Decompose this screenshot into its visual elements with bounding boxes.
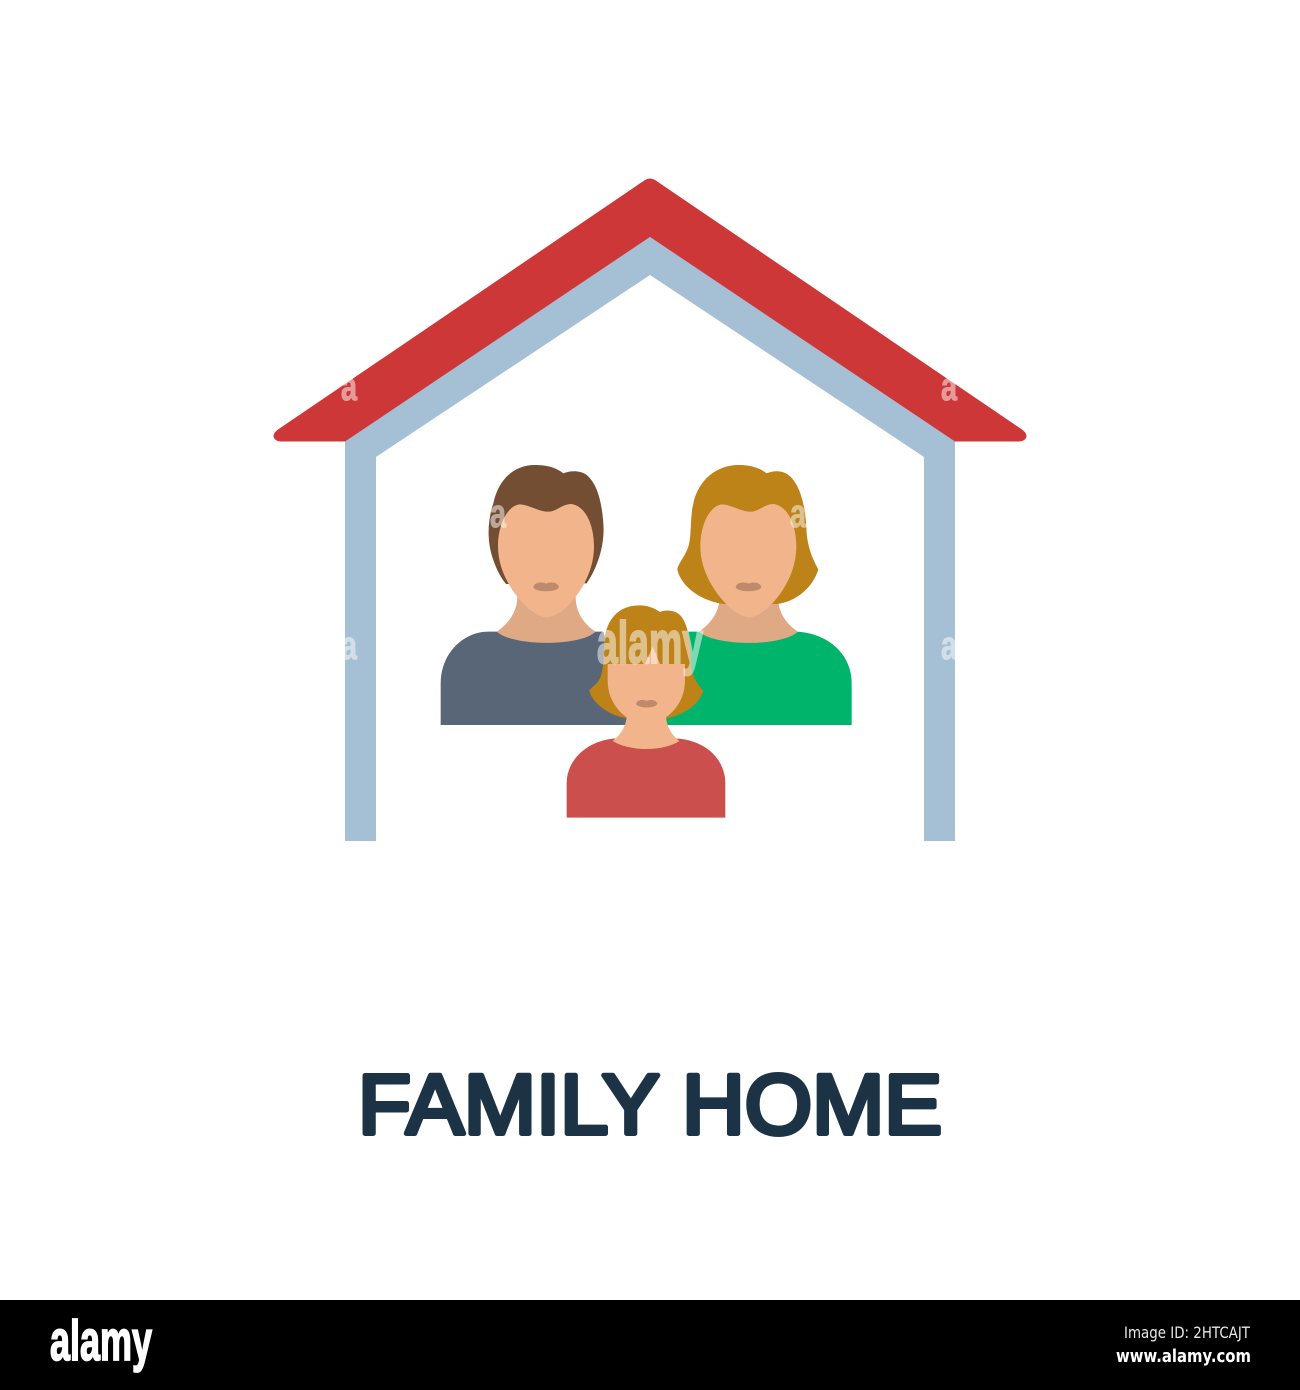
child hair (589, 605, 703, 718)
mother neck (699, 597, 798, 643)
title: FAMILY HOME (358, 1058, 942, 1152)
mother face (700, 504, 796, 617)
footer bar (0, 1300, 1300, 1390)
mother mouth (736, 582, 761, 591)
watermark: centre: alamy (597, 610, 703, 676)
icon: family (441, 465, 852, 818)
mother (663, 465, 852, 725)
child face and neck (608, 647, 685, 749)
watermarks (341, 365, 958, 676)
father (441, 465, 630, 725)
watermark: roof right: a (941, 365, 958, 409)
father mouth (533, 582, 559, 591)
father hair (489, 465, 604, 584)
child mouth (636, 700, 657, 707)
mother shirt (663, 632, 852, 725)
watermark: father: a (490, 492, 507, 536)
father neck (497, 597, 596, 643)
footer logo: alamy (50, 1309, 152, 1373)
house walls (345, 237, 955, 841)
child shirt (567, 739, 725, 818)
father face (498, 504, 594, 617)
icon: house (274, 178, 1026, 841)
roof (274, 178, 1026, 442)
father shirt (441, 632, 630, 725)
child (567, 605, 725, 818)
watermark: mother: a (790, 492, 807, 536)
watermark: wall right: a (941, 624, 958, 668)
image id: Image ID: 2HTCAJT (1124, 1323, 1250, 1342)
watermark: wall left: a (341, 624, 358, 668)
mother hair (677, 465, 818, 604)
website: www.alamy.com (1116, 1346, 1251, 1367)
watermark: roof left: a (341, 365, 358, 409)
